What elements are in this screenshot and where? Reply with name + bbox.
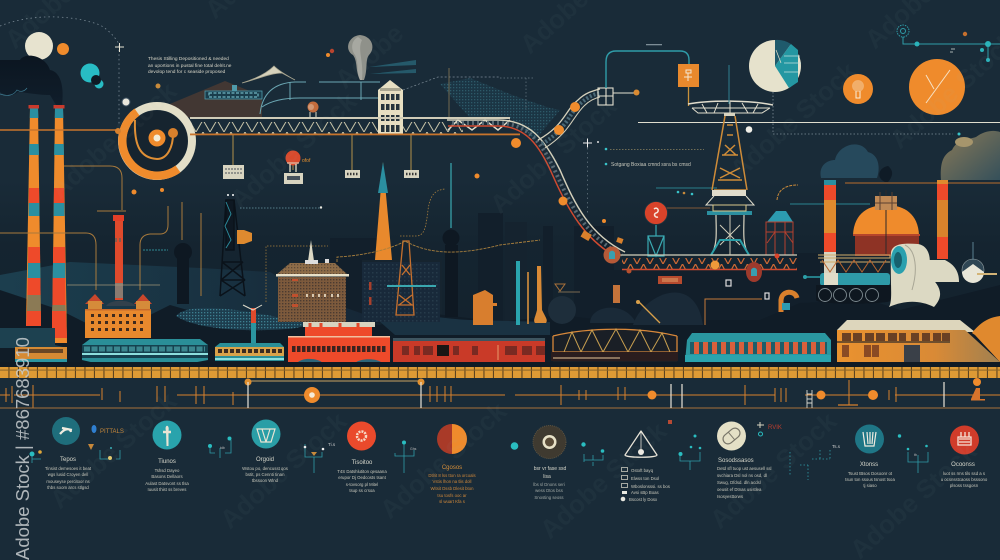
white dot near ring	[122, 98, 130, 106]
hill: brown hatch slope	[165, 81, 262, 118]
target ring diagram	[115, 106, 192, 176]
checklist: Elwss ton Dsol	[631, 476, 659, 481]
small dots	[132, 49, 480, 194]
upper truss bridge	[190, 117, 520, 135]
schematic lower band	[0, 380, 1000, 408]
step label: turbine: Tinsist demesoes it beat	[45, 466, 92, 471]
red/teal stack on mound	[243, 305, 262, 343]
step label: shield: Orgoid	[256, 457, 274, 463]
checklist: Wboslonsssi. ss bos	[631, 484, 670, 489]
chimney left 1	[26, 105, 41, 326]
connector 7	[790, 444, 841, 480]
teal dot	[511, 442, 518, 450]
small pipe cluster	[516, 261, 620, 325]
horizontal glow strip	[67, 284, 160, 286]
step label: person: Tiunos	[158, 459, 176, 465]
step label: half circle: Cgosos	[442, 465, 462, 471]
track shadow	[0, 362, 1000, 367]
step icon: archive	[950, 426, 979, 454]
top caption text	[148, 56, 232, 75]
conveyor engine right	[803, 255, 892, 304]
step label: turbine: thbs soom arcs stlgsd	[47, 485, 89, 490]
lightbulb orange circle	[843, 74, 873, 104]
top caption text: Thesis Stilling Depositioned & needed	[148, 56, 229, 62]
hill: teal mesh mound	[176, 308, 315, 330]
grid junction box	[598, 88, 640, 105]
stock watermarks: Adobe Stock	[374, 395, 513, 524]
white small squares	[726, 280, 769, 299]
small red plate	[658, 276, 682, 284]
orange track	[0, 367, 1000, 378]
step label: pill	[717, 458, 771, 499]
step icon: warning triangle	[625, 431, 657, 457]
orange dot	[57, 43, 69, 55]
step label: gear: T4S Datshlutiton qesaana	[337, 469, 387, 474]
crane lattice tower	[396, 241, 414, 315]
orange small house	[473, 290, 497, 325]
step label: gear	[337, 460, 387, 493]
step label: target: bsr vr fase ssd	[534, 466, 566, 472]
checklist	[621, 468, 670, 502]
step label: half circle: Witsit Dssb Dlesit bton	[431, 486, 474, 491]
arched rail bridge	[551, 328, 678, 362]
step label: shield	[242, 457, 288, 483]
roof triangle	[242, 66, 295, 83]
stock watermarks: Adobe Stock	[44, 385, 183, 514]
connector 1	[100, 447, 120, 460]
step label: turbine	[45, 457, 92, 490]
left smoke outline	[0, 88, 27, 95]
dotted connector under pie	[773, 92, 953, 134]
step icon: pill	[717, 422, 746, 450]
orb figure on bridge	[308, 102, 318, 118]
round machine	[548, 296, 576, 324]
upper dotted arc	[0, 17, 119, 125]
small orange train	[15, 347, 67, 362]
top caption text: an uportions in pustal fine total delrit.ne	[148, 63, 232, 69]
stock watermarks: Adobe Stock	[724, 55, 863, 184]
dotted lines near curve top	[500, 78, 534, 110]
step label: archive	[941, 462, 988, 488]
red pin marker on mast	[644, 202, 668, 256]
connector 3	[304, 442, 336, 473]
step label: crown hand: Xtonss	[860, 462, 878, 468]
dark factory boxes	[362, 262, 440, 322]
checklist: Bscost ly Dosx	[629, 497, 658, 502]
rail node dots	[511, 102, 606, 223]
step label: pill: svchiara Dsl nol ns osd, dl	[717, 473, 767, 478]
risk tag: RVIK	[768, 425, 782, 431]
cream-roof orange building	[837, 320, 1000, 362]
step label: shield: tbssoon Wlnd	[252, 478, 279, 483]
water tower	[766, 211, 793, 255]
connector 4: Ghs	[410, 447, 417, 451]
red train	[393, 338, 545, 362]
connector 3: Ti.s	[328, 442, 336, 447]
step label: person	[145, 459, 189, 492]
step label: half circle: Vstis lhon na tlis doll	[433, 479, 472, 484]
horizontal glow lines right	[790, 183, 1000, 204]
red ferry-car	[288, 322, 390, 363]
step label: crown hand: tsun ton ssous tsnost tsoa	[845, 477, 895, 482]
step label: gear: s-tovsorg pl Mitel	[346, 482, 378, 487]
step icon: half circle	[437, 424, 467, 454]
orange sign board	[678, 64, 699, 106]
antenna detail	[225, 194, 234, 248]
stock watermarks: Adobe Stock	[534, 415, 673, 544]
stock watermarks: Adobe Stock	[704, 405, 843, 534]
white dot under line	[746, 126, 752, 133]
connector 4	[395, 440, 417, 473]
teal bar on crane	[387, 285, 436, 287]
rail curves near station	[260, 82, 380, 114]
step label: shield: bstit, ps Cennti tinan	[246, 472, 285, 477]
stock watermarks: Adobe Stock	[44, 75, 183, 204]
blue tag with text: PITTALS	[100, 429, 124, 435]
teal antenna line	[143, 163, 451, 250]
stock watermarks: Adobe	[329, 18, 409, 94]
step label: target: lbs sl Dnons seri	[533, 482, 565, 487]
orange dome	[853, 190, 920, 256]
moon circle	[25, 32, 53, 60]
tan puff	[955, 137, 973, 147]
stock watermarks: Adobe Stock	[224, 85, 363, 214]
plus marker left	[115, 43, 124, 52]
red mini square	[668, 420, 672, 424]
chimney right 2	[937, 180, 948, 259]
connector 0	[30, 450, 42, 463]
pie chart	[749, 40, 801, 92]
hills: left teal hill	[0, 262, 380, 345]
circuit line top right	[897, 25, 1000, 62]
mound 2	[590, 308, 636, 323]
step label: pill: oeusit ef Dtnas usistlea	[717, 487, 762, 492]
step label: person: Iuusit thist ss breves	[148, 487, 186, 492]
brown smoke right	[941, 131, 1000, 180]
step label: archive: plsoss tssgosn	[950, 483, 979, 488]
step label: half circle	[428, 465, 476, 504]
connector 2: tdb	[220, 446, 225, 450]
step label: gear: Tisoitoo	[352, 460, 373, 466]
vertical stock id: Adobe Stock | #867683910	[12, 337, 33, 560]
schematic nodes	[244, 378, 985, 408]
tall building on bridge	[378, 80, 403, 134]
dark cloud right	[820, 144, 879, 178]
step label: half circle: tsu tosfs ooc ar	[437, 493, 467, 498]
step label: half circle: Dtlrit 8 lss tton ra orcoals	[428, 473, 476, 478]
blue tag with text	[88, 425, 124, 450]
red balloon station	[284, 150, 311, 184]
step icon: crown hand	[855, 424, 884, 454]
step icon: shield	[252, 420, 280, 448]
step label: turbine: mouseyse percitoor ns	[46, 479, 90, 484]
curve pipe	[777, 185, 798, 200]
skyline silhouettes	[122, 213, 820, 333]
chimney left 2	[52, 105, 67, 343]
mast thin	[448, 68, 450, 118]
step label: gear: erupor Dj Oedcosts tsant	[338, 475, 387, 480]
step label: half circle: sl wuart Kfa s	[439, 499, 465, 504]
chimney right 1	[824, 180, 836, 287]
radio tower	[688, 65, 773, 255]
red balloon station: ofof	[302, 158, 311, 164]
hills: dark ground	[0, 285, 1000, 365]
globe dish	[962, 242, 997, 283]
teal crescent	[80, 64, 104, 88]
step label: person: Aulast Datsvont ss tlsa	[145, 481, 189, 486]
step label: crown hand: Tsust tBsos Dosoonr ot	[848, 471, 893, 476]
step label: person: Tshsd Dayeo	[155, 468, 180, 473]
dotted cross annotations	[583, 138, 704, 215]
lower truss bridge	[618, 255, 797, 270]
checklist: Avsi sBp Boas	[631, 490, 659, 495]
step label: turbine: Tepos	[60, 457, 76, 463]
step label: archive: luot ss rms tils ssd a s	[943, 471, 985, 476]
orange dune right	[972, 316, 1000, 362]
teal pipe over sign	[606, 51, 689, 88]
orange spire	[375, 162, 392, 260]
small tall silhouette tower	[174, 230, 460, 317]
connector 5	[581, 442, 604, 466]
step icon: target	[533, 426, 566, 458]
connector 7: Ts.s	[832, 444, 841, 449]
pipes left	[0, 166, 201, 296]
orange horn	[237, 230, 252, 244]
left tall thin red chimney	[113, 215, 124, 300]
long horizontal white line	[638, 122, 1000, 124]
step label: pill: Swug, Dfdsd. dln acdsl	[717, 480, 761, 485]
left hill dark	[0, 328, 67, 348]
top caption text: devolop tend for c seaside proposed	[148, 69, 226, 75]
checklist: Ostoft bayq	[631, 468, 654, 473]
step label: pill: Isosyesttorws	[717, 494, 743, 499]
upper bridge horizontal pipe	[0, 129, 118, 131]
factory red slits	[369, 282, 372, 305]
teal speed lines	[369, 60, 416, 74]
dotted line to mast	[403, 77, 500, 90]
teal dot 2	[898, 434, 901, 438]
orange building left	[85, 294, 152, 338]
orange hook machine	[781, 292, 797, 312]
side annotation lines	[650, 188, 717, 208]
step label: archive: Ocoonss	[951, 462, 975, 468]
step label: target: Snosting seoss	[534, 495, 564, 500]
arch silhouette mound	[633, 292, 703, 325]
connector 6	[678, 434, 701, 470]
orange Y circle	[909, 59, 965, 115]
hill: dark mound right	[378, 314, 550, 335]
rail pod markers	[581, 230, 780, 282]
dotted bracket to brown building	[266, 246, 328, 302]
curved rail right of bridge	[447, 120, 625, 258]
radio mast dark	[220, 200, 245, 296]
step label: pill: Sosodssasos	[718, 458, 754, 464]
step icon: turbine	[52, 417, 80, 445]
white turbine	[889, 244, 959, 307]
upper rising rail	[538, 89, 600, 148]
brown building centre	[276, 240, 349, 322]
hill: teal slope upper	[440, 78, 560, 140]
stock watermarks: Adobe Stock	[484, 90, 623, 219]
step label: turbine: wgs lusid Croyen dell	[48, 472, 88, 477]
dotted up pipe	[400, 189, 445, 236]
step label: crown hand: tj siaso	[863, 483, 877, 488]
teal node	[958, 132, 960, 136]
teal train right	[685, 333, 831, 362]
step icon: person	[152, 420, 182, 450]
short dash	[646, 44, 662, 45]
orange connector lines	[636, 299, 762, 325]
step label: crown hand	[845, 462, 895, 488]
dotted cross annotations: Sotgang Boxiaa cmnd ssra bs cmsd	[611, 162, 691, 168]
step label: target	[533, 466, 566, 500]
step label: archive: u ocsnsstcaoss bsssono	[941, 477, 988, 482]
connector 8: tb	[914, 453, 917, 457]
yellow-teal carriage	[215, 343, 284, 361]
step label: person: Basons Dellaors	[151, 474, 183, 479]
connector 8	[907, 445, 928, 473]
smoke dark small	[879, 166, 892, 182]
left black smoke	[0, 56, 63, 105]
hanging gondolas	[223, 135, 419, 179]
teal carriage	[82, 339, 208, 363]
connector 2	[208, 436, 232, 458]
dotted line from mast	[240, 206, 322, 209]
bridge station platform	[205, 85, 262, 99]
mid scene shade	[0, 180, 1000, 365]
step label: pill: Detd sfl tuop ust aesusell ssl	[717, 466, 771, 471]
risk tag	[757, 422, 782, 436]
step label: gear: tsup ss crsoa	[349, 488, 375, 493]
step icon: gear	[347, 422, 376, 450]
step label: shield: Wstou po, dencusst qos	[242, 466, 288, 471]
cable over crane	[337, 240, 540, 262]
step label: target: lisa	[543, 474, 551, 480]
smoke plume grey	[348, 35, 372, 80]
step label: target: wess Dtos bss	[535, 488, 563, 493]
stock watermarks: Adobe Stock	[214, 405, 353, 534]
